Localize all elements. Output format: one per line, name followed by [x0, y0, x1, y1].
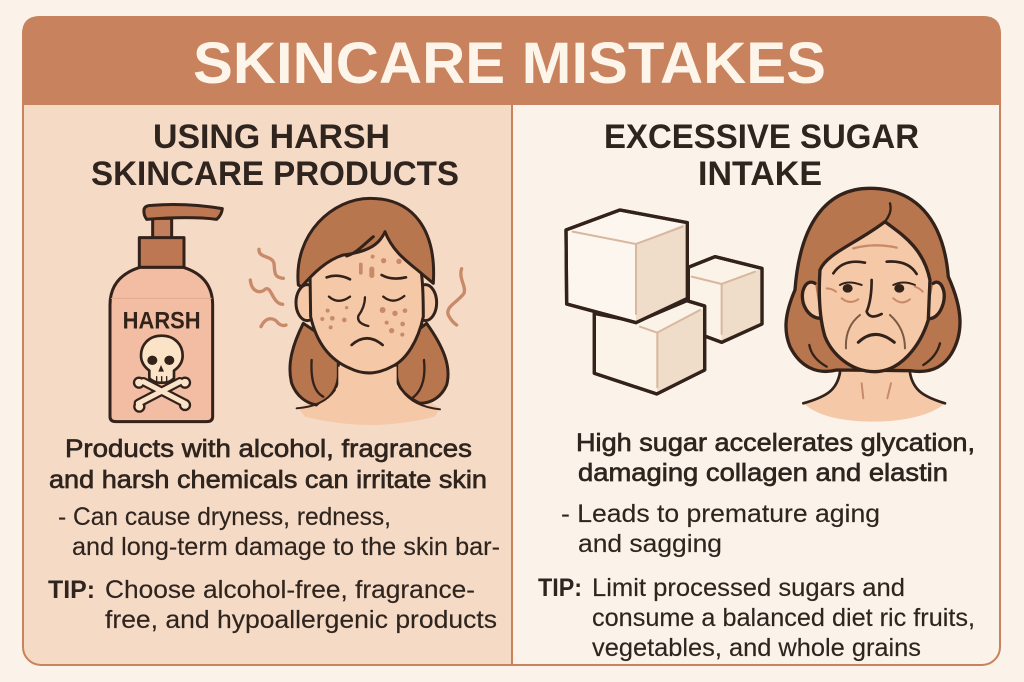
text: tip: Choose alcohol-free, fragrance-	[105, 576, 475, 604]
text: tip: consume a balanced diet ric fruits,	[592, 604, 975, 632]
icon: irritation squiggles	[250, 249, 464, 327]
panel: left	[23, 100, 512, 665]
illustration: aged woman	[786, 188, 960, 422]
illustration: irritated woman	[290, 198, 448, 425]
text: bullet: - Can cause dryness, redness,	[58, 503, 391, 531]
heading: excessive sugar intake	[604, 118, 919, 193]
icon: sugar cubes	[566, 210, 762, 394]
text: bullet: - Leads to premature aging	[561, 500, 880, 528]
text: description: High sugar accelerates glycation,	[576, 429, 975, 457]
text: description: Products with alcohol, fragrances	[65, 435, 472, 463]
text: tip: TIP:	[538, 574, 582, 602]
text: tip	[538, 574, 975, 662]
text: description: and harsh chemicals can irritate skin	[49, 466, 487, 494]
text: tip: free, and hypoallergenic products	[105, 606, 497, 634]
text: bullet	[561, 500, 880, 558]
text: tip: vegetables, and whole grains	[592, 634, 921, 662]
heading: using harsh skincare products: USING HARSH	[153, 118, 390, 156]
heading: excessive sugar intake: INTAKE	[698, 155, 822, 193]
text: tip: TIP:	[48, 576, 95, 604]
title banner	[22, 16, 1001, 105]
title: SKINCARE MISTAKES	[193, 31, 826, 96]
heading: using harsh skincare products	[91, 118, 459, 193]
text: bullet: and long-term damage to the skin bar-	[72, 533, 500, 561]
text: description	[576, 429, 975, 487]
text: description: damaging collagen and elastin	[578, 459, 948, 487]
text: bullet: and sagging	[578, 530, 722, 558]
heading: using harsh skincare products: SKINCARE PRODUCTS	[91, 155, 459, 193]
skin blemishes	[320, 255, 407, 337]
text: tip: Limit processed sugars and	[592, 574, 905, 602]
label: HARSH: HARSH	[123, 308, 201, 335]
icon: skull	[141, 336, 183, 383]
panel: right	[538, 118, 975, 662]
text: tip	[48, 576, 497, 634]
text: description	[49, 435, 487, 494]
text: bullet	[58, 503, 500, 561]
icon: harsh bottle	[110, 205, 222, 422]
heading: excessive sugar intake: EXCESSIVE SUGAR	[604, 118, 919, 156]
icon: crossbones	[134, 378, 190, 412]
